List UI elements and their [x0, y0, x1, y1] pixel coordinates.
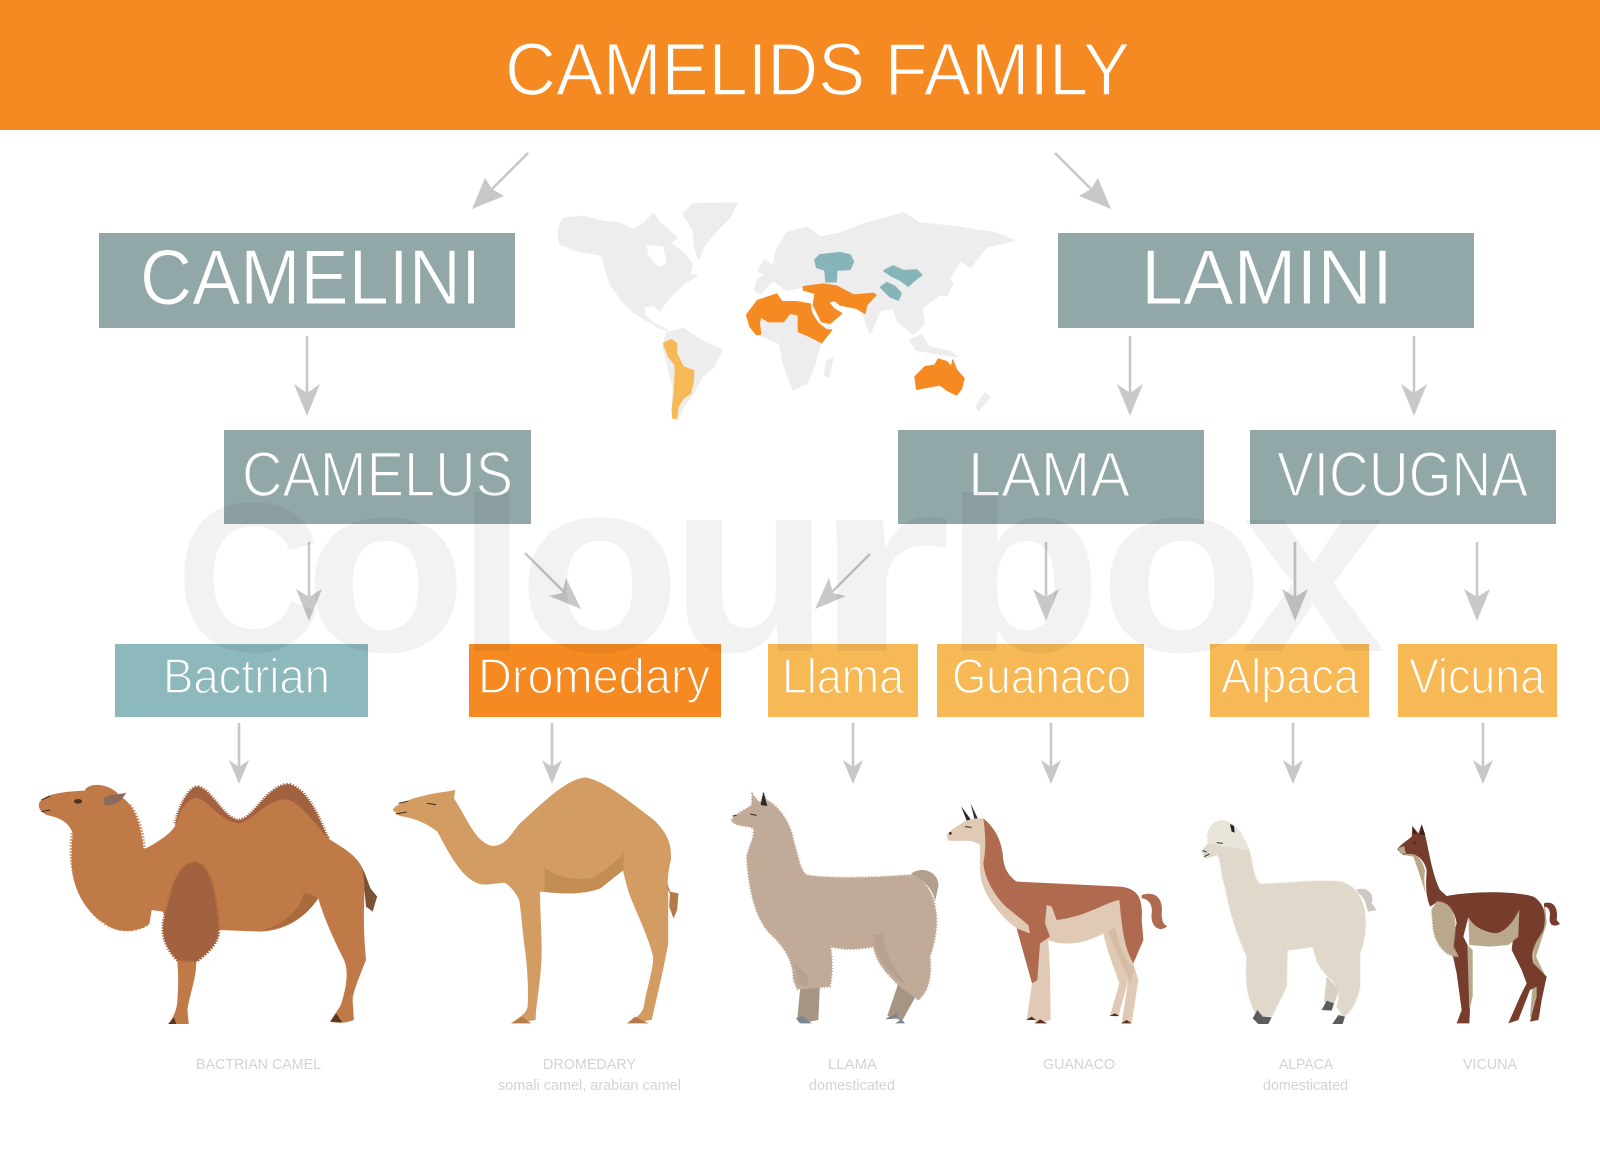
caption: Dromedary: DROMEDARY [543, 1056, 636, 1073]
world map [558, 203, 1013, 420]
arrow: Lamini to Vicugna [1401, 336, 1427, 416]
caption: Llama [809, 1056, 895, 1094]
box: VICUGNA [1250, 430, 1556, 524]
caption: Alpaca [1263, 1056, 1348, 1094]
caption: Bactrian camel: BACTRIAN CAMEL [196, 1056, 321, 1073]
arrow: Bactrian to camel [229, 723, 249, 784]
box: LAMA: LAMA [968, 440, 1130, 510]
caption: Dromedary: somali camel, arabian camel [498, 1077, 681, 1094]
box: Vicuna: Vicuna [1409, 650, 1546, 704]
box: Guanaco: Guanaco [952, 650, 1131, 704]
watermark: r [812, 426, 952, 704]
lamini range: south america [663, 339, 694, 418]
arrow: Lama to Guanaco [1033, 542, 1059, 621]
Hudson bay and inland seas [647, 245, 832, 329]
caption: Llama: domesticated [809, 1077, 895, 1094]
arrow: family to Lamini [1055, 153, 1111, 209]
box: Alpaca [1210, 644, 1369, 717]
arrow: Alpaca to animal [1283, 723, 1303, 784]
caption: Dromedary [498, 1056, 681, 1094]
watermark: C [176, 459, 322, 697]
box: Dromedary: Dromedary [478, 650, 710, 704]
box: Bactrian: Bactrian [163, 650, 330, 704]
arrow: Camelini to Camelus [294, 336, 320, 416]
box: Llama: Llama [782, 650, 905, 704]
box: Guanaco [937, 644, 1144, 717]
vicuna illustration [1397, 824, 1560, 1023]
watermark: o [1099, 426, 1264, 704]
arrow: Lama to Llama [815, 554, 870, 609]
box: VICUGNA: VICUGNA [1277, 440, 1528, 510]
caption: Guanaco: GUANACO [1043, 1056, 1115, 1073]
caption: Alpaca: domesticated [1263, 1077, 1348, 1094]
box: Llama [768, 644, 918, 717]
caption: Llama: LLAMA [828, 1056, 877, 1073]
box: LAMINI [1058, 233, 1474, 328]
llama illustration [732, 792, 938, 1023]
alpaca illustration [1202, 821, 1377, 1024]
bactrian range: teal regions [815, 253, 922, 300]
caption: Alpaca: ALPACA [1279, 1056, 1333, 1073]
box: CAMELUS: CAMELUS [242, 440, 513, 510]
box: LAMINI: LAMINI [1141, 233, 1393, 321]
arrow: Vicugna to Vicuna [1464, 542, 1490, 621]
watermark: o [518, 426, 681, 704]
watermark: b [944, 426, 1102, 704]
camelus range: orange regions [747, 284, 964, 395]
box: CAMELUS [224, 430, 531, 524]
arrow: Guanaco to animal [1041, 723, 1061, 784]
arrow: Llama to animal [843, 723, 863, 784]
arrow: Vicuna to animal [1473, 723, 1493, 784]
watermark: o [304, 426, 467, 704]
box: Vicuna [1398, 644, 1557, 717]
guanaco illustration [947, 803, 1167, 1023]
box: CAMELINI: CAMELINI [140, 233, 481, 321]
box: LAMA [898, 430, 1204, 524]
arrow: family to Camelini [472, 153, 528, 209]
watermark [184, 492, 1384, 654]
box: Bactrian [115, 644, 368, 717]
arrow: Camelus to Dromedary [525, 553, 581, 609]
watermark: l [456, 426, 528, 704]
dromedary illustration [393, 777, 678, 1023]
bactrian camel illustration [39, 784, 377, 1024]
arrow: Vicugna to Alpaca [1282, 542, 1308, 621]
watermark: x [1241, 426, 1386, 704]
box: Alpaca: Alpaca [1221, 650, 1360, 704]
arrow: Dromedary to camel [542, 723, 562, 784]
arrow: Camelus to Bactrian [296, 542, 322, 621]
watermark: u [670, 426, 830, 704]
header banner: CAMELIDS FAMILY [505, 28, 1130, 111]
header banner [0, 0, 1600, 130]
arrow: Lamini to Lama [1117, 336, 1143, 416]
caption: Vicuna: VICUNA [1463, 1056, 1517, 1073]
